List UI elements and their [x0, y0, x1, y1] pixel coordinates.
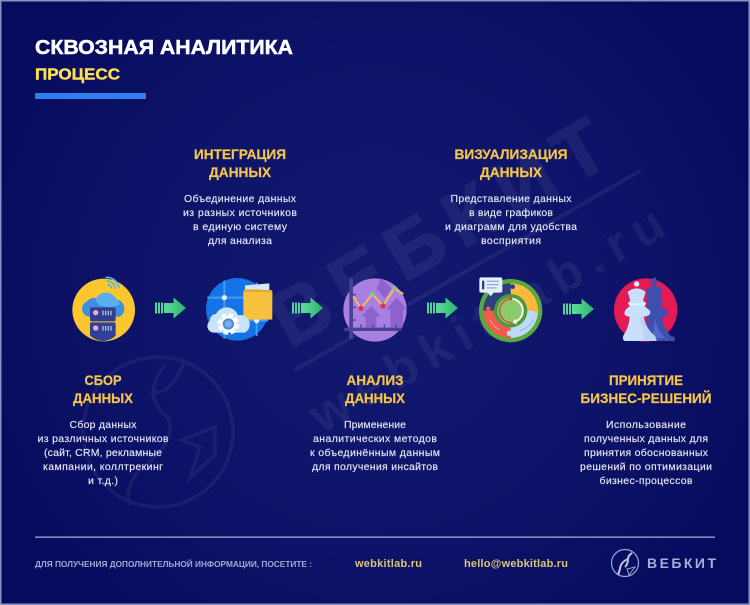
text: визуализация данных: [445, 193, 577, 247]
heading: анализ данных: ДАННЫХ: [345, 390, 406, 406]
text: интеграция данных: в единую систему: [193, 221, 288, 233]
text: визуализация данных: в виде графиков: [469, 207, 553, 219]
heading: принятие бизнес-решений: БИЗНЕС-РЕШЕНИЙ: [580, 389, 712, 406]
heading: визуализация данных: [454, 146, 568, 180]
heading: принятие бизнес-решений: ПРИНЯТИЕ: [609, 372, 683, 388]
footer email: hello@webkitlab.ru: [464, 558, 568, 570]
text: принятие бизнес-решений: бизнес-процессов: [600, 475, 693, 487]
text: анализ данных: Применение: [344, 419, 406, 431]
footer logo: ВЕБКИТ: [647, 555, 716, 571]
text: анализ данных: [310, 419, 440, 473]
icon: data integration: [206, 278, 272, 341]
title accent bar: [35, 93, 146, 99]
icon: cloud server: [72, 277, 135, 341]
heading: визуализация данных: ВИЗУАЛИЗАЦИЯ: [454, 146, 568, 162]
footer divider: [35, 536, 715, 538]
text: анализ данных: для получения инсайтов: [312, 461, 438, 473]
heading: интеграция данных: ИНТЕГРАЦИЯ: [194, 146, 286, 162]
heading: сбор данных: ДАННЫХ: [73, 390, 134, 406]
footer logo: [612, 550, 716, 576]
footer website: webkitlab.ru: [354, 558, 422, 570]
title: СКВОЗНАЯ АНАЛИТИКА: [35, 37, 293, 59]
text: сбор данных: Сбор данных: [70, 419, 137, 431]
subtitle: ПРОЦЕСС: [35, 66, 120, 84]
text: интеграция данных: [183, 193, 297, 247]
heading: анализ данных: [345, 372, 406, 406]
arrow 4: [563, 298, 594, 320]
watermark: ВЕБКИТ: webkitlab.ru: [299, 195, 674, 444]
text: принятие бизнес-решений: [580, 419, 712, 487]
arrow 1: [155, 298, 186, 318]
text: визуализация данных: восприятия: [481, 235, 541, 247]
heading: анализ данных: АНАЛИЗ: [346, 372, 404, 388]
icon: chess pieces: [614, 278, 677, 342]
text: сбор данных: [38, 419, 169, 487]
icon: data visualization wheel: [479, 277, 542, 342]
heading: сбор данных: [73, 372, 134, 406]
heading: принятие бизнес-решений: [580, 372, 712, 406]
text: интеграция данных: Объединение данных: [184, 193, 297, 205]
text: интеграция данных: из разных источников: [183, 207, 297, 219]
text: принятие бизнес-решений: Использование: [606, 419, 686, 431]
heading: сбор данных: СБОР: [84, 372, 122, 388]
text: интеграция данных: для анализа: [208, 235, 272, 247]
icon: data analysis chart: [343, 278, 407, 342]
text: сбор данных: кампании, коллтрекинг: [43, 461, 163, 473]
heading: интеграция данных: [194, 146, 286, 180]
text: принятие бизнес-решений: решений по оптимизации: [580, 461, 712, 473]
text: принятие бизнес-решений: принятия обоснованных: [584, 447, 709, 459]
arrow 2: [292, 298, 323, 318]
text: сбор данных: (сайт, CRM, рекламные: [44, 447, 162, 459]
text: сбор данных: и т.д.): [88, 475, 118, 487]
watermark: ВЕБКИТ: ВЕБКИТ: [254, 101, 622, 364]
heading: визуализация данных: ДАННЫХ: [480, 164, 543, 180]
heading: интеграция данных: ДАННЫХ: [209, 164, 272, 180]
watermark: globe logo: [83, 357, 233, 507]
text: анализ данных: к объединённым данным: [310, 447, 440, 459]
watermark: ВЕБКИТ: [254, 101, 674, 444]
text: визуализация данных: Представление данных: [450, 193, 572, 205]
arrow 3: [427, 298, 458, 318]
text: анализ данных: аналитических методов: [313, 433, 437, 445]
text: принятие бизнес-решений: полученных данных для: [584, 433, 708, 445]
footer note: ДЛЯ ПОЛУЧЕНИЯ ДОПОЛНИТЕЛЬНОЙ ИНФОРМАЦИИ, ПОСЕТИТЕ :: [35, 558, 312, 569]
text: визуализация данных: и диаграмм для удобства: [445, 221, 577, 233]
text: сбор данных: из различных источников: [38, 433, 169, 445]
